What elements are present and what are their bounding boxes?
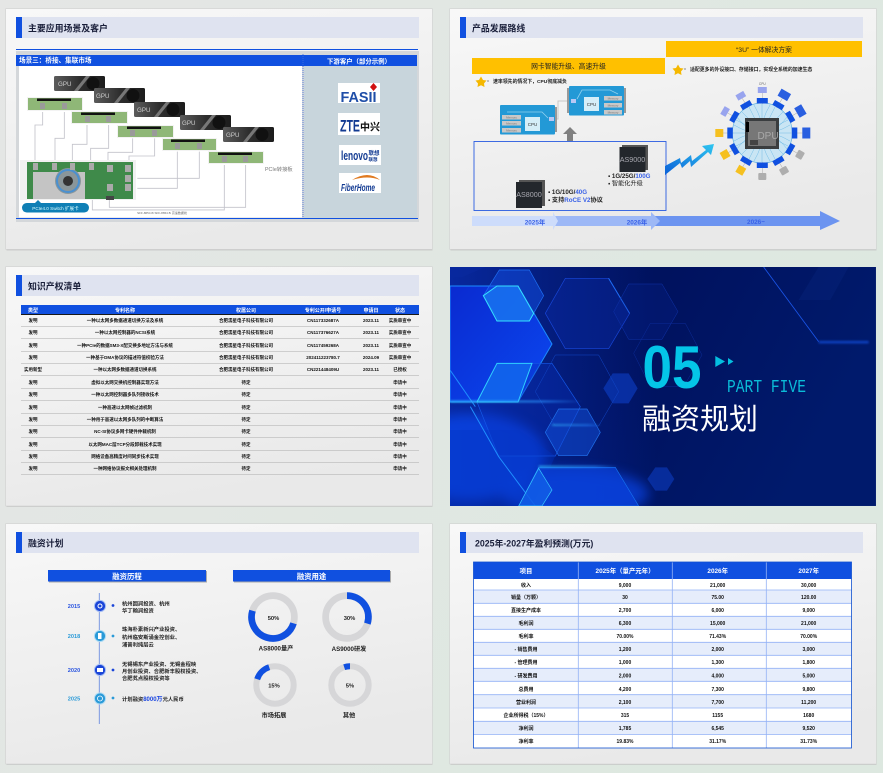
- timeline item 2018: 2018: [68, 634, 80, 640]
- icon: double triangles: [715, 356, 734, 367]
- table: forecast: 21,000: [801, 621, 817, 627]
- table: forecast: 2,000: [711, 647, 724, 653]
- table: patents: 待定: [242, 379, 251, 386]
- table header row: 项目: [520, 567, 532, 575]
- icon: GPU cards: GPU: [96, 93, 109, 100]
- timeline item 2015: 杭州圆润投资、杭州: [122, 600, 170, 608]
- timeline item 2015: [68, 600, 170, 614]
- diagram: DPU hub: CPU: [759, 82, 766, 86]
- table: patents: 待定: [242, 404, 251, 411]
- diagram: CPU modules: [500, 86, 626, 134]
- icon: GPU cards: GPU: [58, 81, 71, 88]
- table: forecast: 9,000: [619, 583, 631, 589]
- table: patents: 一种以太网多数据通道切换方法及系统: [87, 317, 164, 324]
- logo: ZTE: ZTE: [340, 116, 360, 136]
- heading: IP list: 知识产权清单: [28, 280, 81, 292]
- panel: chip generations: [474, 142, 666, 210]
- table: forecast: 总费用: [518, 686, 534, 693]
- slide 4: section divider, financing plan: [450, 267, 876, 506]
- heading: IP list: [16, 275, 419, 296]
- table: forecast: 净利润: [518, 725, 534, 732]
- donut: AS8000 50 percent: 50%: [268, 616, 279, 622]
- donut: market expansion 15 percent: [256, 666, 294, 720]
- timeline item 2020: 无锡锡东产业投资、无锡金程映: [122, 660, 197, 668]
- table: forecast: 75.00: [711, 595, 724, 601]
- donut: market expansion 15 percent: 市场拓展: [262, 712, 286, 720]
- table: forecast: 21,000: [710, 583, 726, 589]
- table: patents: 申请中: [393, 465, 407, 472]
- table: patents: 发明: [28, 342, 38, 349]
- table: forecast: 5,000: [802, 674, 815, 680]
- text: AS9000 features: ▪ 智能化升级: [608, 180, 643, 188]
- donut: AS9000 30 percent: AS9000研发: [332, 645, 367, 653]
- table: forecast: 直接生产成本: [511, 607, 541, 614]
- chip: AS9000: [620, 145, 648, 172]
- table header row: 2026年: [707, 566, 729, 575]
- logo: ZTE: [338, 113, 380, 136]
- table: forecast: 19.83%: [617, 739, 634, 745]
- logo: lenovo: 联想: [368, 149, 380, 157]
- table: forecast: 收入: [521, 582, 531, 589]
- table: patents: 发明: [28, 379, 38, 386]
- table: patents: 发明: [28, 441, 38, 448]
- table: patents: 待定: [242, 391, 251, 398]
- table: forecast: 毛利润: [518, 620, 534, 627]
- slide 2: product roadmap: [450, 9, 876, 251]
- table: forecast: 2,100: [619, 700, 631, 706]
- table: patents: 一种PCIe的数据SM3-X配交换多地址方法与系统: [77, 342, 173, 349]
- heading: application scenarios: [16, 17, 419, 38]
- table header: 申请日: [363, 307, 379, 314]
- heading: product roadmap: [460, 17, 863, 38]
- table: patents: 合肥濡星电子科技有限公司: [219, 342, 273, 349]
- table: forecast: 7,300: [711, 687, 724, 693]
- text: AS9000 features: ▪ 1G/25G/100G: [608, 173, 651, 180]
- banner: NIC upgrade: [472, 58, 665, 74]
- slide 3: intellectual property list: [6, 267, 432, 507]
- timeline item 2020: 月创业投资、合肥新丰股权投资、: [122, 667, 201, 675]
- icon: GPU cards: GPU: [137, 107, 150, 114]
- timeline item 2018: 杭州临安斯涌金控创业、: [122, 633, 180, 641]
- logo: FiberHome: [339, 173, 381, 194]
- table: patents: 发明: [28, 404, 38, 411]
- table: patents: 申请中: [393, 453, 407, 460]
- arrow: 2026 onward: [652, 211, 840, 230]
- heading: application scenarios: 主要应用场景及客户: [28, 22, 108, 34]
- table: patents: 实质审查中: [389, 317, 412, 324]
- diagram: CPU modules: Memory: [608, 97, 619, 101]
- donut: AS8000 50 percent: AS8000量产: [259, 644, 293, 652]
- table header row: 2025年（量产元年）: [596, 566, 654, 575]
- label: part five: PART FIVE: [727, 377, 806, 398]
- heading: financing plan: 融资计划: [28, 538, 64, 548]
- donut: market expansion 15 percent: 15%: [268, 684, 280, 690]
- table: forecast: 7,700: [711, 700, 724, 706]
- table: forecast: 1,000: [619, 660, 631, 666]
- table: patents: 发明: [28, 317, 38, 324]
- table header: 专利公开/申请号: [305, 307, 341, 314]
- section number: 05: [642, 334, 702, 401]
- heading: profit forecast: 2025年-2027年盈利预测(万元): [475, 538, 593, 548]
- slide 5: financing plan: [6, 524, 432, 765]
- diagram: CPU modules: CPU: [528, 122, 537, 127]
- table: forecast: 31.17%: [709, 739, 727, 745]
- table: forecast: 1,300: [711, 660, 724, 666]
- label: PCIe switch card pill: [22, 200, 89, 212]
- table: forecast: - 管理费用: [514, 659, 538, 666]
- donut: AS9000 30 percent: [326, 596, 368, 653]
- table: forecast: 企业所得税（15%）: [503, 712, 549, 719]
- text: AS9000 features: [608, 173, 651, 188]
- diagram: CPU modules: CPU: [587, 102, 596, 107]
- panel: downstream customers: 下游客户（部分示例）: [327, 56, 391, 66]
- donut: AS8000 50 percent: [252, 596, 294, 652]
- logo: ZTE: 中兴: [360, 120, 380, 134]
- table header: 专利名称: [115, 307, 135, 314]
- table: patents: 申请中: [393, 379, 407, 386]
- table: forecast: 70.00%: [617, 634, 634, 640]
- table: patents: CN221448409U: [307, 367, 339, 372]
- table: patents: 待定: [242, 416, 251, 423]
- table: patents: 一种以太网控制器的NCSI系统: [95, 329, 156, 336]
- text: AS8000 features: ▪ 支持RoCE V2协议: [548, 196, 604, 204]
- heading: product roadmap: 产品发展路线: [472, 22, 525, 34]
- table header: 类型: [28, 307, 38, 314]
- table: forecast: 2,700: [619, 608, 631, 614]
- table: patents: CN117459268A: [307, 343, 340, 348]
- label: high-speed cable: SFF-8654 8i SFF-8654 8i 高速数据线: [137, 210, 187, 215]
- timeline item 2018: 浦普利纯层云: [122, 640, 154, 648]
- chip: AS9000: AS9000: [620, 155, 645, 164]
- bar title: use of funds: 融资用途: [297, 572, 327, 581]
- table: forecast: 毛利率: [518, 633, 534, 640]
- table: forecast: 2,000: [619, 674, 631, 680]
- table: forecast: 3,000: [802, 647, 815, 653]
- table: patents: 一种以太网控制器多队列接收技术: [91, 391, 159, 398]
- table: patents: 待定: [242, 441, 251, 448]
- table: forecast: 71.43%: [709, 634, 727, 640]
- panel: downstream customers: [303, 54, 417, 218]
- table: patents: 2024.09: [363, 355, 380, 360]
- table: forecast: 4,200: [619, 687, 631, 693]
- table: forecast: 1,785: [619, 726, 631, 732]
- timeline item 2018: 珠海朴素新兴产业投资、: [122, 625, 180, 633]
- panel: bridging and cascading market diagram: 场景三：桥接、集联市场: [19, 56, 92, 64]
- icon: PCIe adapter boards: [27, 97, 264, 164]
- table: forecast: 315: [621, 713, 629, 719]
- table: patents: 2023.11: [363, 367, 379, 372]
- arrow: upgrade up: [563, 127, 577, 141]
- icon: GPU cards: [54, 76, 274, 142]
- table: patents: 网络设备高精度时间同步技术实现: [91, 453, 159, 460]
- timeline item 2015: 华丁翰润投资: [122, 606, 154, 614]
- label: PCIe switch card pill: PCIe4.0 Switch 扩展卡: [32, 205, 79, 212]
- chip: DPU: DPU: [757, 131, 779, 142]
- table: patents: 合肥濡星电子科技有限公司: [219, 366, 273, 373]
- timeline item 2020: 合肥芄点股权投资等: [122, 674, 170, 682]
- table: forecast: 净利率: [518, 738, 534, 745]
- text: AS8000 features: [548, 189, 604, 204]
- table: forecast: 11,200: [801, 700, 816, 706]
- logo: FASII: [338, 83, 380, 106]
- table: patents: 实质审查中: [389, 329, 412, 336]
- table: forecast: 30,000: [801, 583, 817, 589]
- panel: bridging and cascading market diagram: [16, 49, 419, 222]
- table: patents: 合肥濡星电子科技有限公司: [219, 354, 273, 361]
- banner: 3U integrated solution: “3U” 一体解决方案: [736, 45, 792, 54]
- donut: AS9000 30 percent: 30%: [344, 616, 355, 622]
- table: patents: 实用新型: [24, 366, 42, 373]
- bar title: financing history: 融资历程: [112, 572, 142, 581]
- table: forecast: 6,545: [711, 726, 724, 732]
- bar title: financing history: [48, 570, 207, 582]
- table: patents: 合肥濡星电子科技有限公司: [219, 317, 273, 324]
- table: patents: 发明: [28, 453, 38, 460]
- table: patents: 虚拟以太网交换机控制器实现方法: [91, 379, 159, 386]
- timeline item 2025: 计划融资8000万元人民币: [122, 695, 184, 703]
- slide 1: application scenarios and customers: [6, 9, 432, 251]
- table: patents: CN117376627A: [307, 330, 340, 335]
- table: patents: NC-SI协议多网卡硬件仲裁机制: [94, 428, 156, 435]
- table: forecast: [474, 562, 852, 748]
- table: patents: 待定: [242, 465, 251, 472]
- arrow: growth zigzag: [665, 144, 714, 175]
- timeline item 2020: [68, 660, 201, 682]
- icon: PCIe switch card: [20, 160, 136, 200]
- table: forecast: 营业利润: [516, 699, 536, 706]
- table: forecast: 30: [622, 595, 628, 601]
- table: forecast: 1680: [803, 713, 814, 719]
- table: patents: 申请中: [393, 416, 407, 423]
- spokes and interface blocks: [757, 87, 768, 104]
- diagram: CPU modules: Memory: [506, 116, 517, 120]
- table: patents: 2023.11: [363, 330, 379, 335]
- diagram: CPU modules: Memory: [608, 104, 619, 108]
- table: patents: 2023.11: [363, 318, 379, 323]
- arrow: 2026: [554, 212, 660, 230]
- table: forecast: 9,800: [802, 687, 815, 693]
- table: forecast: - 研发费用: [514, 672, 538, 680]
- table: forecast: 6,300: [619, 621, 631, 627]
- timeline item 2020: 2020: [68, 668, 80, 674]
- logo: lenovo: lenovo: [341, 148, 368, 163]
- table: patents: 2023.11: [363, 343, 379, 348]
- table: patents: 申请中: [393, 404, 407, 411]
- table: patents: [21, 305, 419, 474]
- chip: AS8000: [516, 180, 545, 208]
- logo: lenovo: 联想: [368, 156, 378, 163]
- background: hexagon pattern: [450, 267, 876, 506]
- chip: AS8000: AS8000: [516, 190, 542, 199]
- panel: use of funds: [233, 570, 391, 720]
- timeline item 2015: 2015: [68, 604, 80, 610]
- diagram: DPU hub: [715, 82, 810, 180]
- table: patents: 发明: [28, 391, 38, 398]
- table header: 权属公司: [236, 307, 256, 314]
- logo: FiberHome: FiberHome: [341, 182, 375, 194]
- table: forecast: 销量（万颗）: [511, 594, 541, 601]
- table: forecast: 6,000: [711, 608, 724, 614]
- table: forecast: 4,000: [711, 674, 724, 680]
- text: AS8000 features: ▪ 1G/10G/40G: [548, 189, 587, 196]
- table: patents: 发明: [28, 416, 38, 423]
- table: patents: 申请中: [393, 391, 407, 398]
- donut: other 5 percent: 其他: [343, 712, 356, 720]
- logo: lenovo: [339, 145, 381, 165]
- table: forecast: 1155: [712, 713, 723, 719]
- icon: star and note, 3U: [672, 64, 812, 75]
- icon: star and note, 3U: 适配更多的外设接口、存储接口，实现全系统的加速生态: [690, 66, 812, 73]
- icon: star and note, NIC: [476, 76, 567, 87]
- table: patents: 实质审查中: [389, 354, 412, 361]
- table: patents: 一种网络协议报文相关处理机制: [94, 465, 157, 472]
- icon: GPU cards: GPU: [182, 120, 195, 127]
- logo: FASII: FASII: [340, 89, 376, 106]
- arrow: 2025: [472, 212, 558, 230]
- table: patents: 发明: [28, 354, 38, 361]
- table: patents: 一种以太网多数据通道切换系统: [94, 366, 157, 373]
- table: forecast: 70.00%: [800, 634, 818, 640]
- timeline item 2025: 2025: [68, 696, 80, 702]
- heading: profit forecast: [460, 532, 863, 553]
- donut: other 5 percent: 5%: [346, 684, 354, 690]
- table: forecast: 31.73%: [800, 739, 818, 745]
- table header row: [474, 562, 852, 579]
- heading: financing plan: [16, 532, 419, 553]
- table: patents: 待定: [242, 453, 251, 460]
- table header row: 2027年: [798, 566, 820, 575]
- donut: other 5 percent: [331, 666, 369, 720]
- arrow: 2025: 2025年: [525, 218, 546, 226]
- timeline item 2018: [68, 625, 180, 648]
- table: patents: 待定: [242, 428, 251, 435]
- table: patents: 一种高速以太网帧过滤机制: [98, 404, 152, 411]
- table: patents: CN117332687A: [307, 318, 340, 323]
- icon: GPU cards: GPU: [226, 132, 239, 139]
- table: patents: 一种基于DMA协议的描述符值校验方法: [86, 354, 164, 361]
- banner: 3U integrated solution: [666, 41, 862, 57]
- table header: 状态: [395, 307, 405, 314]
- table: patents: 一种用于高速以太网多队列的中断算法: [87, 416, 164, 423]
- table: patents: 以太网MAC层TCP分段卸载技术实现: [88, 441, 162, 448]
- label: PCIe adapter board: PCIe转接板: [265, 165, 293, 173]
- diagram: CPU modules: Memory: [506, 122, 517, 126]
- table: patents: 发明: [28, 428, 38, 435]
- wiring between adapters and switch card: [35, 112, 246, 210]
- slide 6: profit forecast: [450, 524, 876, 765]
- table: patents: 实质审查中: [389, 342, 412, 349]
- timeline item 2025: [68, 693, 184, 704]
- table: forecast: 1,200: [619, 647, 631, 653]
- table: patents: 发明: [28, 465, 38, 472]
- diagram: CPU modules: Memory: [506, 129, 517, 133]
- banner: NIC upgrade: 网卡智能升级、高速升级: [531, 62, 606, 70]
- panel: financing history: [48, 570, 207, 724]
- table header: [21, 305, 419, 315]
- table: patents: 已授权: [393, 366, 407, 373]
- table: forecast: 15,000: [710, 621, 726, 627]
- arrow: 2026: 2026年: [627, 218, 648, 226]
- bar title: use of funds: [233, 570, 391, 582]
- table: forecast: 120.00: [801, 595, 817, 601]
- table: patents: 申请中: [393, 441, 407, 448]
- table: patents: 合肥濡星电子科技有限公司: [219, 329, 273, 336]
- table: forecast: - 销售费用: [514, 646, 538, 653]
- table: forecast: 9,520: [802, 726, 815, 732]
- section title: 融资规划: [642, 403, 758, 436]
- timeline arrow: [472, 211, 840, 230]
- table: forecast: 9,000: [802, 608, 815, 614]
- table: patents: 申请中: [393, 428, 407, 435]
- icon: star and note, NIC: 速率领先的情况下，CPU彻底减负: [493, 78, 567, 85]
- table: forecast: 1,800: [802, 660, 815, 666]
- table: patents: 202411223780.7: [306, 355, 340, 360]
- arrow: 2026 onward: 2026~: [747, 219, 765, 226]
- diagram: CPU modules: Memory: [608, 111, 619, 115]
- table: patents: 发明: [28, 329, 38, 336]
